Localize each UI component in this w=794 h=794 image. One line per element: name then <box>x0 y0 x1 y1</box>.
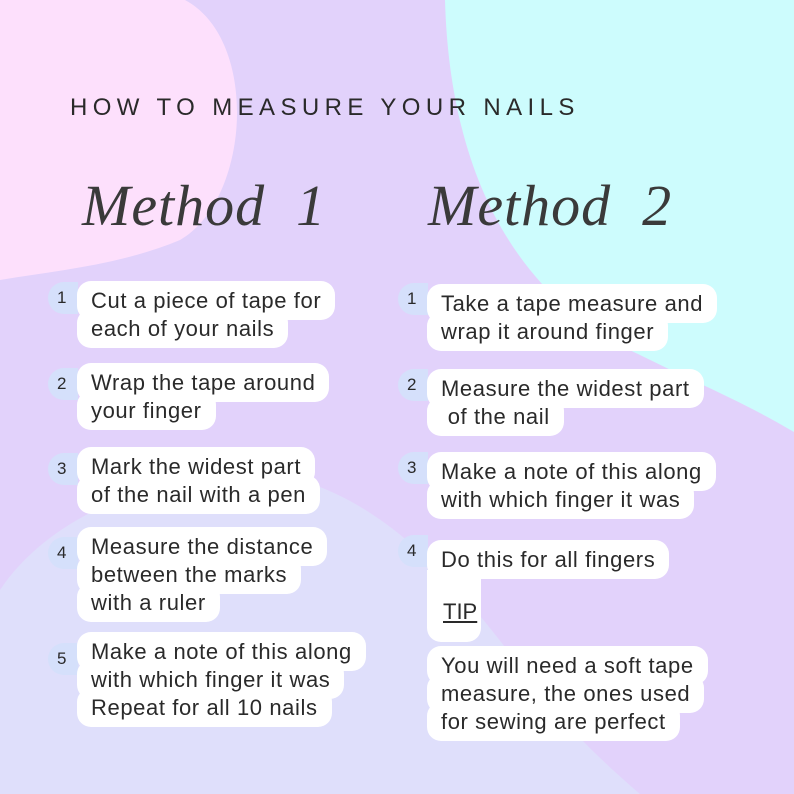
panel: method 1 steps: Cut a piece of tape for <box>91 288 321 313</box>
panel: method 1 steps: between the marks <box>91 562 287 587</box>
panel: method 1 steps: Mark the widest part <box>91 454 301 479</box>
tip text: You will need a soft tape <box>441 653 694 678</box>
title: HOW TO MEASURE YOUR NAILS <box>70 94 580 121</box>
panel: method 1 steps <box>48 281 366 727</box>
tip label <box>427 570 481 642</box>
heading: Method 2: Method 2 <box>428 173 672 238</box>
panel: method 1 steps: with which finger it was <box>91 667 330 692</box>
panel: method 2 steps: of the nail <box>448 404 550 429</box>
panel: method 1 steps: Wrap the tape around <box>91 370 315 395</box>
step 1 <box>48 281 335 348</box>
panel: method 2 steps: Take a tape measure and <box>441 291 703 316</box>
tip text: for sewing are perfect <box>441 709 666 734</box>
panel: method 1 steps: 4 <box>57 543 66 562</box>
panel: method 1 steps: 5 <box>57 649 66 668</box>
heading: Method 1: Method 1 <box>82 173 326 238</box>
panel: method 1 steps: 1 <box>57 288 66 307</box>
panel: method 2 steps <box>398 283 717 741</box>
panel: method 1 steps: 3 <box>57 459 66 478</box>
panel: method 2 steps: Measure the widest part <box>441 376 690 401</box>
panel: method 2 steps: with which finger it was <box>441 487 680 512</box>
step 4 <box>48 527 327 622</box>
step 2 <box>398 369 704 436</box>
panel: method 1 steps: 2 <box>57 374 66 393</box>
panel: method 2 steps: Do this for all fingers <box>441 547 655 572</box>
tip text <box>427 646 708 741</box>
panel: method 2 steps: 3 <box>407 458 416 477</box>
panel: method 1 steps: Measure the distance <box>91 534 313 559</box>
panel: method 2 steps: Make a note of this along <box>441 459 702 484</box>
panel: method 1 steps: Make a note of this along <box>91 639 352 664</box>
panel: method 1 steps: each of your nails <box>91 316 274 341</box>
tip text: measure, the ones used <box>441 681 690 706</box>
step 1 <box>398 283 717 351</box>
panel: method 1 steps: your finger <box>91 398 202 423</box>
step 2 <box>48 363 329 430</box>
panel: method 1 steps: Repeat for all 10 nails <box>91 695 318 720</box>
panel: method 2 steps: 4 <box>407 541 416 560</box>
step 5 <box>48 632 366 727</box>
step 3 <box>48 447 320 514</box>
panel: method 2 steps: 1 <box>407 289 416 308</box>
panel: method 2 steps: wrap it around finger <box>441 319 654 344</box>
step 4 <box>398 535 669 579</box>
step 3 <box>398 452 716 519</box>
panel: method 1 steps: of the nail with a pen <box>91 482 306 507</box>
tip label: TIP <box>443 599 477 624</box>
panel: method 2 steps: 2 <box>407 375 416 394</box>
panel: method 1 steps: with a ruler <box>91 590 206 615</box>
